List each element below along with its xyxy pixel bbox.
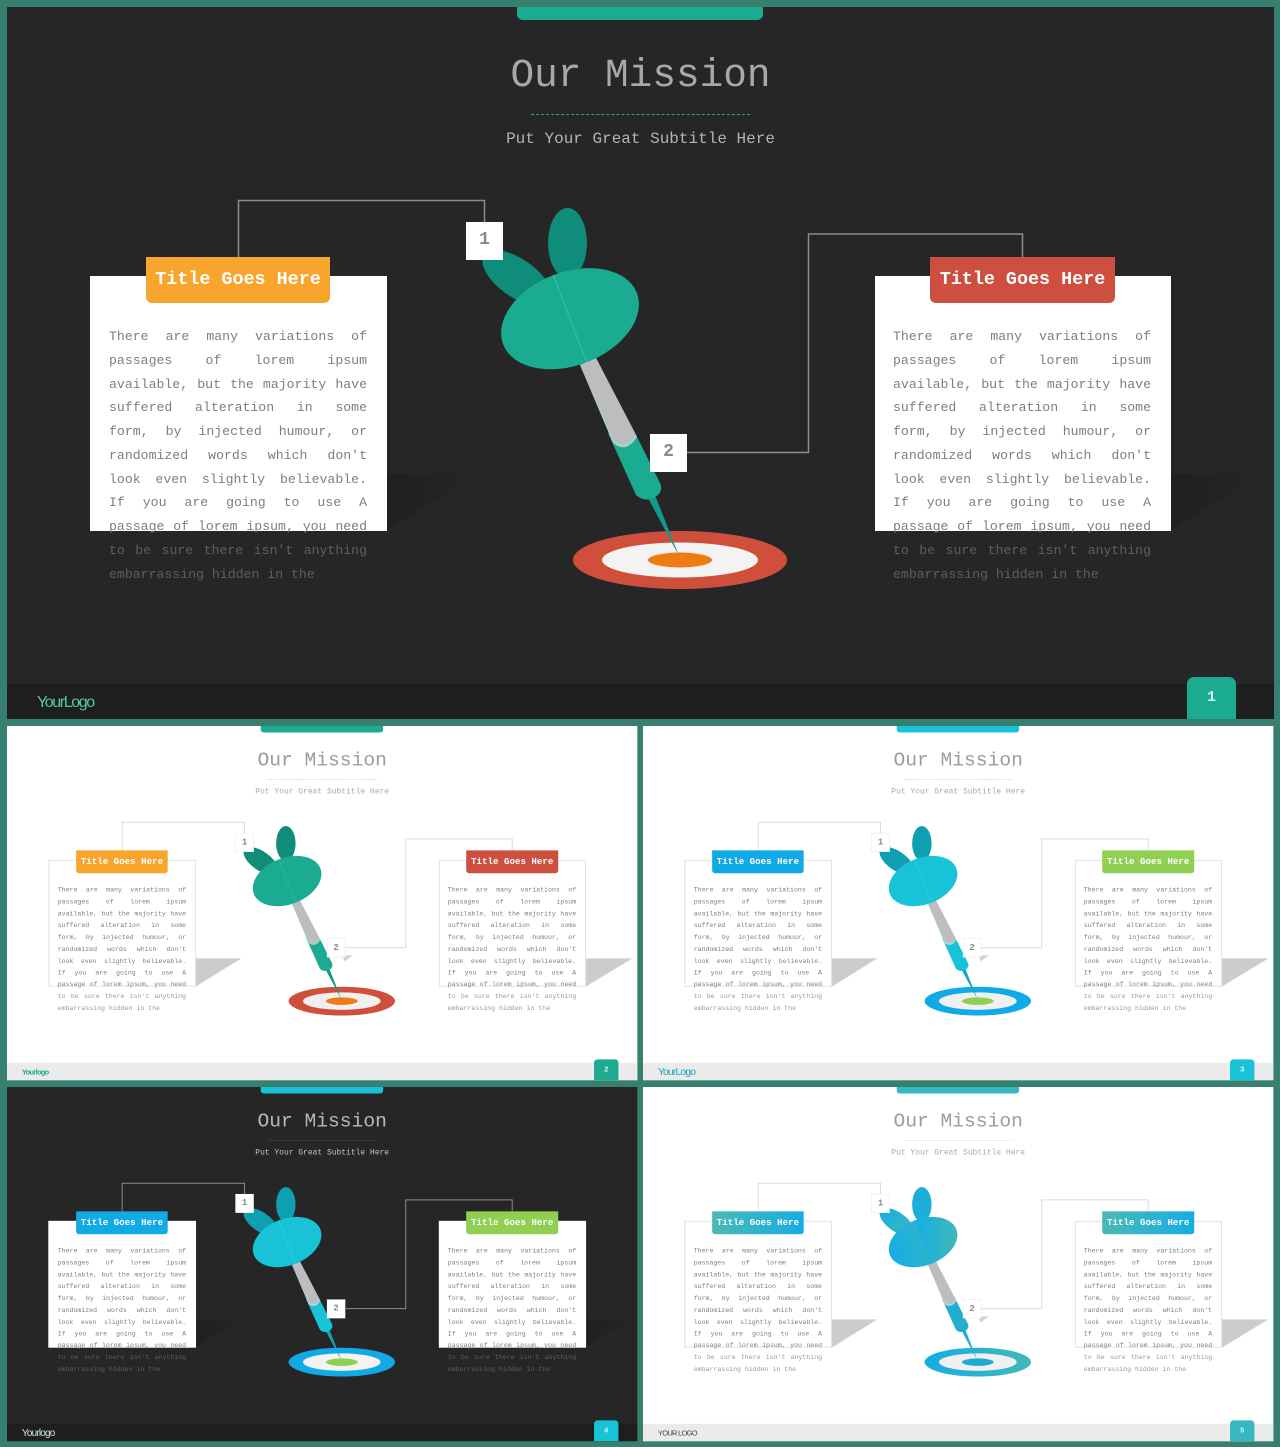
right card heading [466, 850, 558, 873]
panel: left card [684, 860, 832, 987]
right card text: passage of lorem ipsum, you need [1084, 981, 1212, 988]
panel: right card [439, 860, 586, 987]
left card text: randomized words which don't [58, 1306, 186, 1314]
right card text: suffered alteration in some [448, 922, 576, 929]
callout 1: 1 [878, 837, 883, 847]
right card heading: Title Goes Here [471, 856, 553, 867]
callout 2 [650, 434, 687, 472]
left card text: form, by injected humour, or [58, 933, 186, 941]
right card text: randomized words which don't [448, 945, 576, 953]
right card text: passage of lorem ipsum, you need [448, 1342, 576, 1349]
left card text: randomized words which don't [109, 448, 367, 463]
right card text: to be sure there isn't anything [448, 993, 576, 1000]
callout 2 [327, 1299, 345, 1318]
left card text: form, by injected humour, or [109, 424, 367, 439]
right card text: suffered alteration in some [893, 400, 1151, 415]
left card text: form, by injected humour, or [58, 1294, 186, 1302]
right card text [893, 329, 1151, 582]
footer bar [7, 684, 1274, 719]
dart and target illustration [880, 1187, 1032, 1376]
left card text: passage of lorem ipsum, you need [109, 519, 367, 534]
callout 1 [871, 1194, 890, 1213]
callout 2: 2 [333, 1303, 339, 1313]
left card text: passages of lorem ipsum [58, 1259, 186, 1266]
right card text: If you are going to use A [893, 495, 1151, 510]
left card text: available, but the majority have [694, 1271, 822, 1278]
right card text: suffered alteration in some [1084, 922, 1212, 929]
left card heading [146, 257, 330, 303]
right card text [1084, 1247, 1212, 1373]
subtitle: Put Your Great Subtitle Here [255, 1148, 389, 1157]
left card text: look even slightly believable. [694, 1318, 822, 1326]
callout 2: 2 [663, 442, 674, 462]
top tab [897, 1087, 1019, 1093]
left card text: to be sure there isn't anything [109, 543, 367, 558]
left card text: passage of lorem ipsum, you need [694, 1342, 822, 1349]
dart and target illustration [244, 1187, 396, 1376]
callout 2 [963, 1299, 981, 1318]
left card text: passage of lorem ipsum, you need [58, 981, 186, 988]
slide 3: light slide, blue and green [643, 726, 1273, 1080]
panel: right card [1075, 1221, 1222, 1348]
right card text: suffered alteration in some [1084, 1283, 1212, 1290]
left card text: There are many variations of [58, 1247, 186, 1255]
right card text: available, but the majority have [448, 1271, 576, 1278]
right card text: suffered alteration in some [448, 1283, 576, 1290]
right card heading [1102, 850, 1194, 873]
logo: Yourlogo [22, 1428, 54, 1439]
title: Our Mission [257, 1110, 387, 1132]
callout 1: 1 [242, 837, 247, 847]
left card text: embarrassing hidden in the [694, 1004, 796, 1012]
logo: YourLogo [37, 694, 94, 711]
callout 2 [963, 938, 981, 957]
left card text: passage of lorem ipsum, you need [58, 1342, 186, 1349]
right card text: If you are going to use A [1084, 969, 1212, 976]
left card text: to be sure there isn't anything [694, 993, 822, 1000]
dart [473, 208, 679, 556]
left card text: passages of lorem ipsum [109, 353, 367, 368]
right card heading [1102, 1211, 1194, 1234]
left card text: to be sure there isn't anything [694, 1354, 822, 1361]
right card text: If you are going to use A [448, 1330, 576, 1337]
left card text: to be sure there isn't anything [58, 993, 186, 1000]
right card text: form, by injected humour, or [448, 933, 576, 941]
right card text: If you are going to use A [448, 969, 576, 976]
subtitle: Put Your Great Subtitle Here [891, 787, 1025, 796]
dart and target illustration [880, 826, 1032, 1016]
right card text: passages of lorem ipsum [448, 898, 576, 905]
title: Our Mission [893, 1110, 1023, 1132]
left card text: There are many variations of [58, 886, 186, 894]
left card text: suffered alteration in some [109, 400, 367, 415]
connectors and shadows [238, 200, 1024, 454]
left card text: available, but the majority have [58, 1271, 186, 1278]
right card text: to be sure there isn't anything [448, 1354, 576, 1361]
footer bar [643, 1424, 1273, 1441]
right card text: embarrassing hidden in the [448, 1365, 550, 1373]
left card text: look even slightly believable. [58, 1318, 186, 1326]
logo: YourLogo [658, 1066, 695, 1078]
top tab [517, 7, 763, 20]
slide 4: dark slide, blue and green [7, 1087, 637, 1441]
left card text: embarrassing hidden in the [58, 1004, 160, 1012]
right card text: passage of lorem ipsum, you need [893, 519, 1151, 534]
callout 1 [235, 1194, 254, 1213]
left card text: look even slightly believable. [58, 957, 186, 965]
connectors and shadows [122, 822, 632, 986]
page number: 4 [604, 1426, 608, 1435]
left card text: available, but the majority have [58, 910, 186, 917]
page number: 3 [1240, 1065, 1244, 1074]
panel: left card [684, 1221, 832, 1348]
subtitle: Put Your Great Subtitle Here [891, 1148, 1025, 1157]
right card text: look even slightly believable. [448, 957, 576, 965]
left card text: If you are going to use A [58, 1330, 186, 1337]
target [925, 1348, 1031, 1377]
right card text: available, but the majority have [448, 910, 576, 917]
right card text: embarrassing hidden in the [893, 566, 1099, 582]
left card heading [712, 850, 804, 873]
left card text [58, 886, 186, 1012]
right card text: embarrassing hidden in the [1084, 1004, 1186, 1012]
right card text: passages of lorem ipsum [1084, 898, 1212, 905]
dashed rule [904, 1139, 1013, 1142]
right card text: form, by injected humour, or [893, 424, 1151, 439]
right card heading: Title Goes Here [1107, 856, 1189, 867]
right card text: to be sure there isn't anything [1084, 1354, 1212, 1361]
panel: right card [875, 276, 1171, 531]
callout 2: 2 [333, 943, 339, 953]
left card text: available, but the majority have [109, 376, 367, 392]
left card text [58, 1247, 186, 1373]
right card heading: Title Goes Here [471, 1217, 553, 1228]
left card text: passage of lorem ipsum, you need [694, 981, 822, 988]
top tab [897, 726, 1019, 732]
title: Our Mission [893, 749, 1023, 771]
right card text: passages of lorem ipsum [448, 1259, 576, 1266]
callout 2: 2 [969, 943, 975, 953]
right card text: look even slightly believable. [893, 472, 1151, 486]
right card heading [930, 257, 1115, 303]
right card text: to be sure there isn't anything [893, 543, 1151, 558]
right card text: look even slightly believable. [1084, 1318, 1212, 1326]
left card heading: Title Goes Here [717, 1217, 799, 1228]
dart and target illustration [244, 826, 396, 1016]
target [573, 531, 787, 589]
callout 2 [327, 938, 345, 957]
right card text: look even slightly believable. [448, 1318, 576, 1326]
left card text [109, 329, 367, 582]
page number: 2 [604, 1065, 608, 1074]
right card text: There are many variations of [448, 1247, 576, 1255]
left card text: If you are going to use A [109, 495, 367, 510]
right card text [448, 1247, 576, 1373]
left card text: If you are going to use A [58, 969, 186, 976]
left card text: embarrassing hidden in the [694, 1365, 796, 1373]
left card heading [76, 1211, 168, 1234]
right card text: randomized words which don't [1084, 1306, 1212, 1314]
right card text: passage of lorem ipsum, you need [1084, 1342, 1212, 1349]
callout 1: 1 [242, 1198, 247, 1208]
right card text: passages of lorem ipsum [1084, 1259, 1212, 1266]
left card text: form, by injected humour, or [694, 933, 822, 941]
right card text: There are many variations of [1084, 1247, 1212, 1255]
left card heading: Title Goes Here [81, 1217, 163, 1228]
page number [1187, 677, 1236, 719]
dashed rule [268, 778, 377, 781]
left card heading [712, 1211, 804, 1234]
left card text [694, 886, 822, 1012]
connectors and shadows [758, 822, 1268, 986]
panel: right card [439, 1221, 586, 1348]
right card text: form, by injected humour, or [448, 1294, 576, 1302]
logo: Yourlogo [22, 1068, 49, 1076]
right card text: form, by injected humour, or [1084, 1294, 1212, 1302]
right card text: There are many variations of [1084, 886, 1212, 894]
dart [875, 826, 977, 999]
page number: 1 [1207, 689, 1216, 706]
left card text: suffered alteration in some [694, 1283, 822, 1290]
right card text [1084, 886, 1212, 1012]
callout 1: 1 [878, 1198, 883, 1208]
left card text: to be sure there isn't anything [58, 1354, 186, 1361]
title: Our Mission [257, 749, 387, 771]
right card text: form, by injected humour, or [1084, 933, 1212, 941]
dart [239, 1187, 341, 1360]
right card text: available, but the majority have [1084, 910, 1212, 917]
left card text: form, by injected humour, or [694, 1294, 822, 1302]
left card text: look even slightly believable. [694, 957, 822, 965]
dashed rule [268, 1139, 377, 1142]
left card text: suffered alteration in some [58, 922, 186, 929]
left card text: randomized words which don't [694, 1306, 822, 1314]
dashed rule [531, 114, 750, 115]
left card text: embarrassing hidden in the [109, 566, 315, 582]
panel: left card [90, 276, 387, 531]
top tab [261, 726, 383, 732]
footer bar [7, 1063, 637, 1080]
left card text: passages of lorem ipsum [694, 1259, 822, 1266]
right card heading [466, 1211, 558, 1234]
subtitle: Put Your Great Subtitle Here [506, 130, 775, 148]
left card text: suffered alteration in some [58, 1283, 186, 1290]
page number [1230, 1059, 1254, 1080]
connectors and shadows [758, 1182, 1268, 1348]
left card text: There are many variations of [694, 886, 822, 894]
right card text: available, but the majority have [1084, 1271, 1212, 1278]
panel: right card [1075, 860, 1222, 987]
right card text: look even slightly believable. [1084, 957, 1212, 965]
top tab [261, 1087, 383, 1093]
left card heading: Title Goes Here [717, 856, 799, 867]
right card text: embarrassing hidden in the [1084, 1365, 1186, 1373]
page number [594, 1059, 618, 1080]
right card heading: Title Goes Here [940, 269, 1105, 290]
right card text: passage of lorem ipsum, you need [448, 981, 576, 988]
right card text: If you are going to use A [1084, 1330, 1212, 1337]
right card text: There are many variations of [893, 329, 1151, 344]
callout 1 [235, 833, 254, 852]
subtitle: Put Your Great Subtitle Here [255, 787, 389, 796]
panel: left card [48, 860, 196, 987]
page number [594, 1420, 618, 1441]
left card heading [76, 850, 168, 873]
title: Our Mission [510, 53, 771, 98]
callout 1: 1 [479, 230, 490, 250]
left card text [694, 1247, 822, 1373]
right card text: embarrassing hidden in the [448, 1004, 550, 1012]
target [289, 987, 395, 1016]
dart [875, 1187, 977, 1360]
logo: YOUR LOGO [658, 1429, 697, 1437]
left card text: passages of lorem ipsum [694, 898, 822, 905]
left card text: passages of lorem ipsum [58, 898, 186, 905]
right card text: There are many variations of [448, 886, 576, 894]
panel: left card [48, 1221, 196, 1348]
left card text: If you are going to use A [694, 969, 822, 976]
right card text: randomized words which don't [1084, 945, 1212, 953]
dashed rule [904, 778, 1013, 781]
target [289, 1348, 395, 1377]
left card text: There are many variations of [109, 329, 367, 344]
slide 5: light slide, gradient blue [643, 1087, 1273, 1441]
callout 2: 2 [969, 1304, 975, 1314]
right card text: to be sure there isn't anything [1084, 993, 1212, 1000]
footer bar [643, 1063, 1273, 1080]
page number [1230, 1420, 1254, 1441]
footer bar [7, 1424, 637, 1441]
left card text: suffered alteration in some [694, 922, 822, 929]
left card text: available, but the majority have [694, 910, 822, 917]
page number: 5 [1240, 1426, 1244, 1435]
left card text: randomized words which don't [694, 945, 822, 953]
left card text: randomized words which don't [58, 945, 186, 953]
callout 1 [466, 222, 503, 260]
left card text: If you are going to use A [694, 1330, 822, 1337]
right card heading: Title Goes Here [1107, 1217, 1189, 1228]
dart and target illustration [482, 208, 787, 589]
left card heading: Title Goes Here [155, 269, 321, 290]
left card heading: Title Goes Here [81, 856, 163, 867]
callout 1 [871, 833, 890, 852]
slide 2: light slide, orange and red [7, 726, 637, 1080]
slide 1: large dark slide [7, 7, 1274, 719]
left card text: embarrassing hidden in the [58, 1365, 160, 1373]
right card text: available, but the majority have [893, 376, 1151, 392]
right card text: passages of lorem ipsum [893, 353, 1151, 368]
left card text: look even slightly believable. [109, 472, 367, 486]
target [925, 987, 1031, 1016]
left card text: There are many variations of [694, 1247, 822, 1255]
dart [239, 826, 341, 999]
right card text: randomized words which don't [448, 1306, 576, 1314]
connectors and shadows [122, 1182, 513, 1310]
right card text [448, 886, 576, 1012]
right card text: randomized words which don't [893, 448, 1151, 463]
